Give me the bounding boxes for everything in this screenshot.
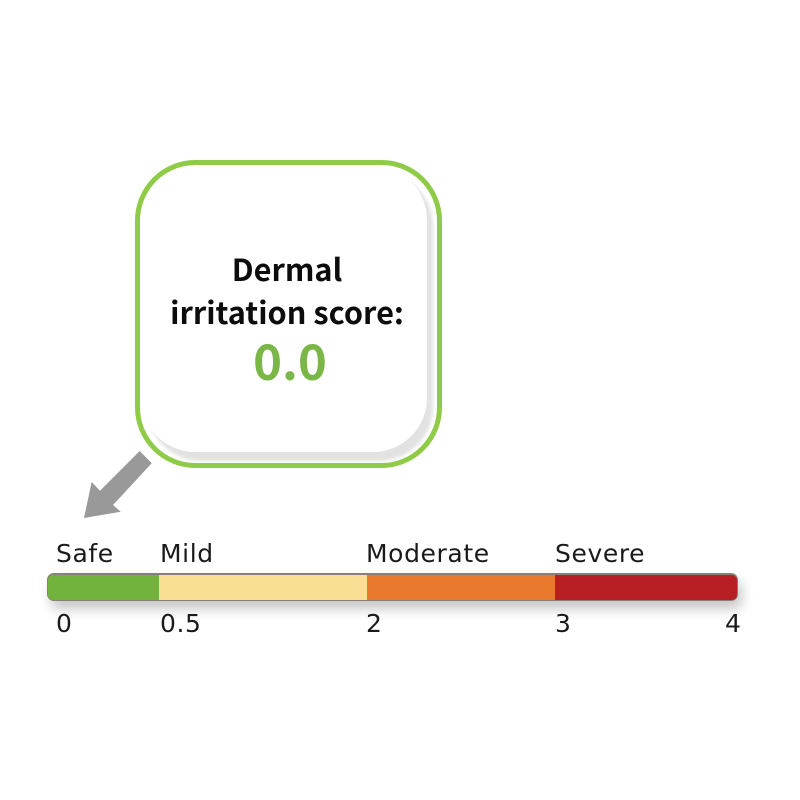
- arrow pointing to safe zone: [84, 451, 152, 518]
- tick 2: 2: [366, 609, 383, 638]
- heading: dermal irritation score: [170, 245, 404, 333]
- tick 0.5: 0.5: [160, 609, 202, 638]
- scale numbers: [56, 609, 742, 638]
- label safe: Safe: [56, 539, 114, 568]
- tick 4: 4: [725, 609, 742, 638]
- label moderate: Moderate: [366, 539, 490, 568]
- moderate segment: [367, 575, 555, 600]
- heading: dermal irritation score: Dermal: [232, 245, 342, 290]
- tick 0: 0: [56, 609, 73, 638]
- mild segment: [159, 575, 367, 600]
- safe segment: [48, 575, 159, 600]
- severe segment: [555, 575, 737, 600]
- score value: 0.0: [253, 324, 327, 395]
- heading: dermal irritation score: irritation score:: [170, 288, 404, 333]
- label severe: Severe: [555, 539, 645, 568]
- label mild: Mild: [160, 539, 214, 568]
- tick 3: 3: [555, 609, 572, 638]
- callout card: [135, 160, 442, 468]
- severity scale bar: [47, 573, 738, 601]
- severity labels: [56, 539, 645, 568]
- card shape: [135, 160, 442, 468]
